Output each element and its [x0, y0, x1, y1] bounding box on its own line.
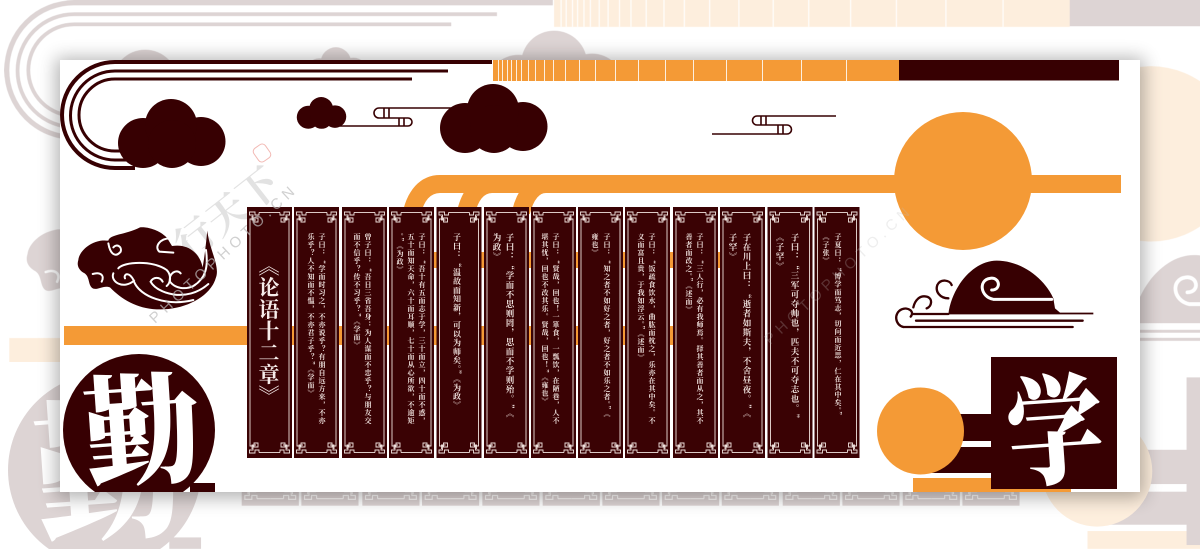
plaques group: [247, 207, 860, 458]
plaque 10: [720, 207, 765, 458]
plaque 12: 子夏曰：“博学而笃志，切问而近思，仁在其中矣。”: [833, 233, 843, 419]
small cloud: [297, 97, 346, 129]
concentric arc lines, top left: [62, 62, 492, 168]
orange underline bar: [913, 478, 1071, 492]
cloud wisp right: [712, 116, 836, 134]
plaque 6: 堪其忧，回也不改其乐。贤哉，回也！”《雍也》: [540, 232, 550, 406]
勤 character: 勤: [77, 332, 206, 512]
main artwork: [62, 60, 1121, 512]
plaque 3: 子曰：“吾十有五而志于学，三十而立，四十而不惑，: [417, 233, 427, 425]
plaque 7: 雍也》: [590, 232, 600, 257]
plaque 2: 而不信乎？传不习乎？”《学而》: [352, 233, 362, 350]
plaque 6: [531, 207, 576, 458]
plaque 11: 子曰：“三军可夺帅也，匹夫不可夺志也。”: [789, 233, 801, 423]
dome cloud right: [896, 261, 1093, 327]
plaque 4: [436, 207, 482, 458]
学 character: 学: [1000, 335, 1108, 511]
plaque 3: [389, 207, 434, 458]
plaque 3: 五十而知天命，六十而耳顺，七十而从心所欲，不逾矩: [406, 233, 416, 425]
plaque 9: [673, 207, 718, 458]
plaque 5: 为政》: [491, 232, 503, 262]
plaque 1: 子曰：“学而时习之，不亦说乎？有朋自远方来，不亦: [317, 233, 327, 425]
plaque 8: 子曰：“饭疏食饮水，曲肱而枕之，乐亦在其中矣。不: [647, 233, 657, 425]
plaque 7: [578, 207, 623, 458]
勤 badge: [63, 332, 215, 512]
dark connector bars: [925, 414, 995, 441]
plaque 8: 义而富且贵，于我如浮云。”《述而》: [636, 233, 646, 362]
plaque 8: [625, 207, 670, 458]
plaque 4: 子曰：“温故而知新，可以为师矣。”《为政》: [452, 233, 462, 410]
white panel: [60, 60, 1140, 492]
watermark: seal: [252, 142, 272, 164]
watermark calligraphy: 行天下: [160, 152, 291, 271]
plaque 10: 子罕》: [727, 233, 739, 262]
plaque 7: 子曰：“知之者不如好之者，好之者不如乐之者。”《: [602, 233, 612, 418]
plaque 9: 子曰：“三人行，必有我师焉。择其善者而从之，其不: [695, 233, 705, 425]
title text: 《论语十二章》: [254, 255, 284, 407]
学 block: [877, 335, 1117, 511]
cloud wisp centre: [340, 108, 462, 126]
large cloud left: [118, 99, 226, 168]
orange pipe lines: [412, 184, 1121, 212]
plaque 5: 子曰：“学而不思则罔，思而不学则殆。”《: [504, 233, 516, 419]
plaque 12: [814, 207, 860, 458]
plaque 5: [484, 207, 529, 458]
plaque 9: 善者而改之。”《述而》: [684, 232, 694, 314]
orange circle: [877, 388, 964, 474]
plaque 10: 子在川上曰：“逝者如斯夫，不舍昼夜。”《: [741, 233, 753, 419]
plaque 3: 。”《为政》: [395, 233, 405, 274]
plaque 11: 《子罕》: [774, 233, 786, 271]
plaque 2: [342, 207, 387, 458]
dark bar top right: [899, 60, 1119, 80]
ornate auspicious cloud: [78, 227, 217, 309]
large cloud centre: [440, 84, 548, 153]
orange striped band: [493, 60, 899, 81]
panel shadow: [56, 58, 1144, 498]
watermark url right: PHOTOPHOTO.CN: [761, 201, 917, 348]
dark square: [991, 357, 1117, 489]
orange strips behind plaques: [64, 252, 720, 345]
plaque 12: 《子张》: [821, 233, 831, 265]
plaque 2: 曾子曰：“吾日三省吾身：为人谋而不忠乎？与朋友交: [363, 232, 373, 425]
plaque 1: 乐乎？人不知而不愠，不亦君子乎？”《学而》: [306, 232, 316, 398]
orange circle top right: [894, 112, 1032, 250]
watermark url left: PHOTOPHOTO.CN: [146, 180, 302, 327]
plaque 6: 子曰：“贤哉，回也！一箪食，一瓢饮，在陋巷，人不: [551, 233, 561, 425]
plaque 11: [768, 207, 812, 458]
plaque: title: [247, 207, 292, 458]
plaque 1: [294, 207, 339, 458]
